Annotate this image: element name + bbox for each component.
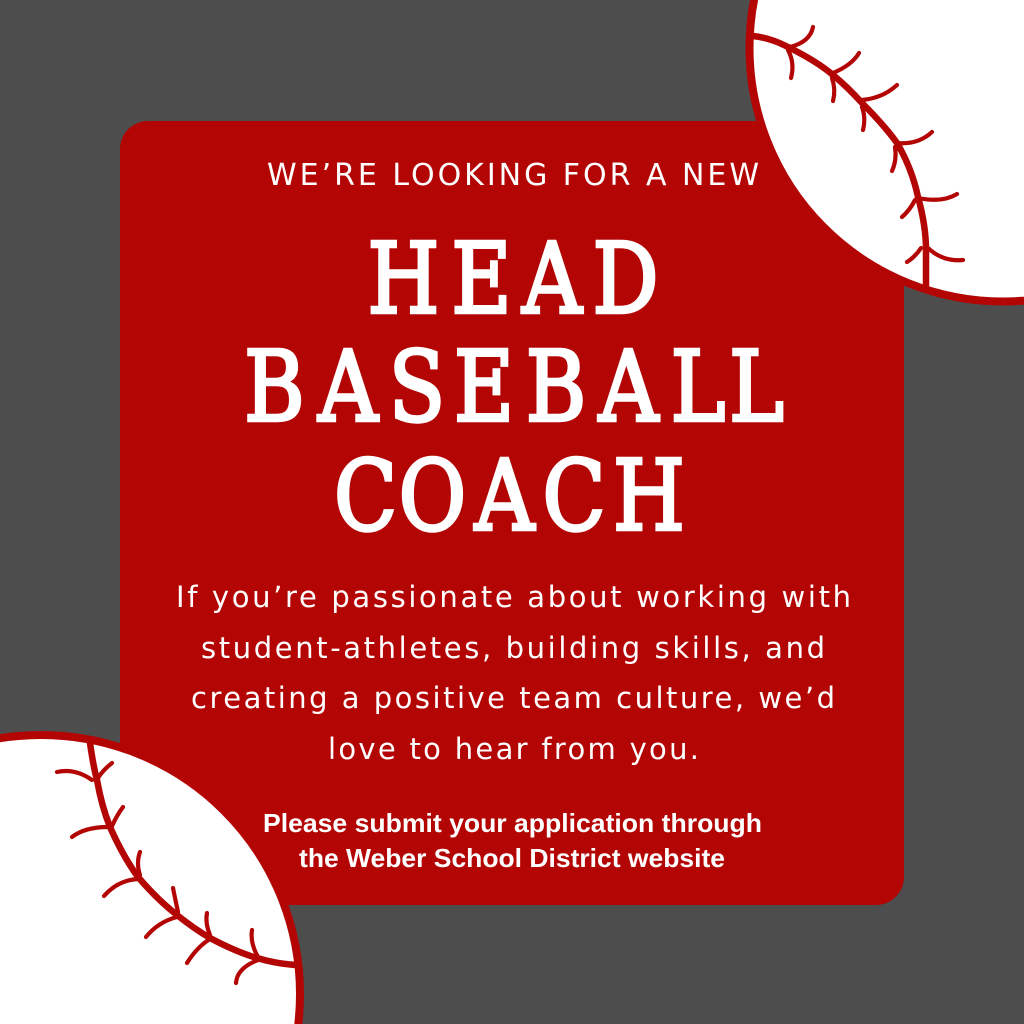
application call to action xyxy=(263,808,762,873)
icon: baseball top right xyxy=(750,0,1024,302)
body paragraph: If you’re passionate about working with xyxy=(176,580,851,614)
icon: baseball bottom left xyxy=(0,735,300,1024)
title: head baseball coach xyxy=(244,223,784,553)
body paragraph: creating a positive team culture, we’d xyxy=(191,681,835,715)
title: head baseball coach: BASEBALL xyxy=(244,331,784,444)
application call to action: the Weber School District website xyxy=(299,843,725,873)
panel: red announcement card xyxy=(120,121,904,905)
body paragraph: student-athletes, building skills, and xyxy=(201,631,825,665)
body paragraph: love to hear from you. xyxy=(328,732,699,766)
application call to action: Please submit your application through xyxy=(263,808,762,838)
title: head baseball coach: COACH xyxy=(334,440,685,553)
body paragraph xyxy=(176,580,851,766)
title: head baseball coach: HEAD xyxy=(368,223,659,336)
intro line: WE’RE LOOKING FOR A NEW xyxy=(267,158,759,193)
